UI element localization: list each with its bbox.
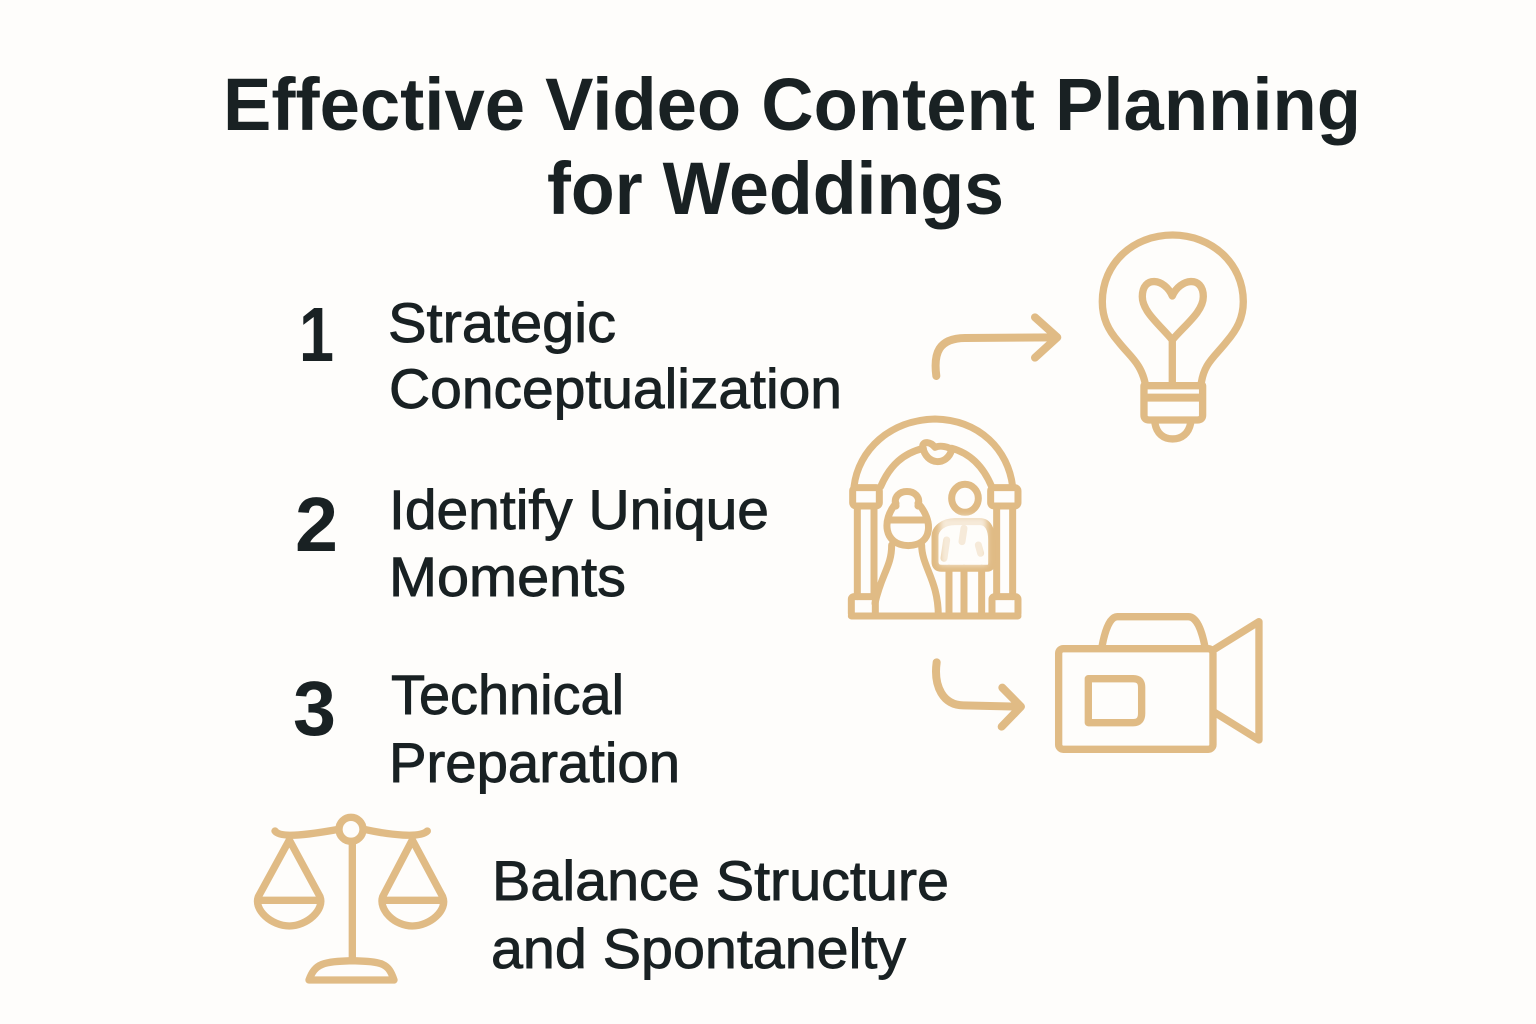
step 1 text: Strategic bbox=[388, 291, 616, 354]
step 2 bbox=[295, 478, 769, 608]
step 1 text: Conceptualization bbox=[389, 357, 842, 420]
step 3 text: Preparation bbox=[389, 731, 680, 794]
arrow: couple to camera bbox=[936, 662, 1021, 727]
balance text: and Spontanelty bbox=[491, 917, 906, 980]
step 1 bbox=[299, 291, 842, 420]
number 2: 2 bbox=[295, 482, 338, 568]
step 1 text bbox=[388, 291, 842, 420]
step 2 text bbox=[389, 478, 769, 608]
number 1: 1 bbox=[299, 292, 334, 378]
balance text bbox=[491, 849, 949, 980]
icon: balance scale bbox=[257, 817, 444, 980]
step 3 text bbox=[389, 663, 680, 794]
icon: couple under arch bbox=[851, 419, 1018, 616]
step 2 text: Identify Unique bbox=[389, 478, 769, 541]
step 3 text: Technical bbox=[391, 663, 624, 726]
step 2 text: Moments bbox=[389, 545, 626, 608]
number 3: 3 bbox=[293, 666, 336, 752]
arrow: couple to bulb bbox=[936, 317, 1057, 376]
step 3 bbox=[293, 663, 680, 794]
balance text: Balance Structure bbox=[492, 849, 949, 912]
title bbox=[223, 63, 1361, 230]
icon: video camera bbox=[1059, 617, 1259, 749]
title: Effective Video Content Planning bbox=[223, 63, 1361, 146]
icon: light bulb with heart bbox=[1102, 235, 1243, 439]
title: for Weddings bbox=[547, 147, 1004, 230]
